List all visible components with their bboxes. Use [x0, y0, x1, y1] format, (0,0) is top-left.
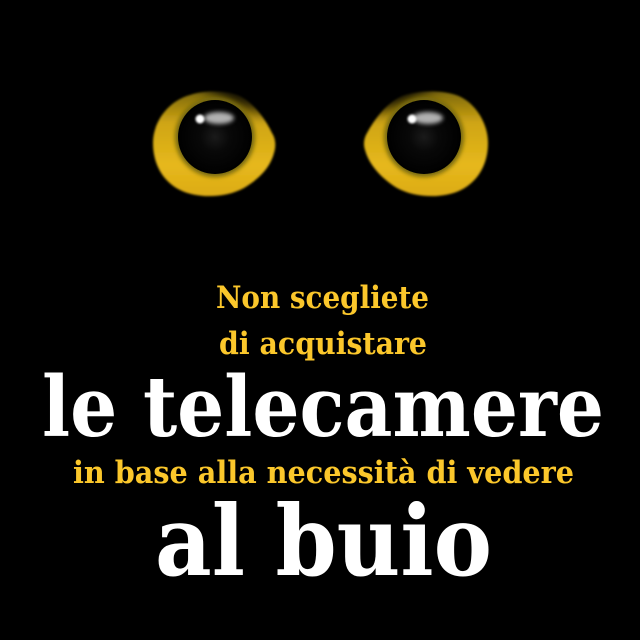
text: di acquistare: di acquistare [219, 326, 427, 362]
icon: right cat eye [340, 54, 488, 196]
icon: left cat eye [153, 54, 296, 196]
text: Non scegliete: Non scegliete [216, 280, 429, 316]
heading: al buio: al buio [155, 484, 492, 598]
text: in base alla necessità di vedere: in base alla necessità di vedere [73, 455, 574, 491]
